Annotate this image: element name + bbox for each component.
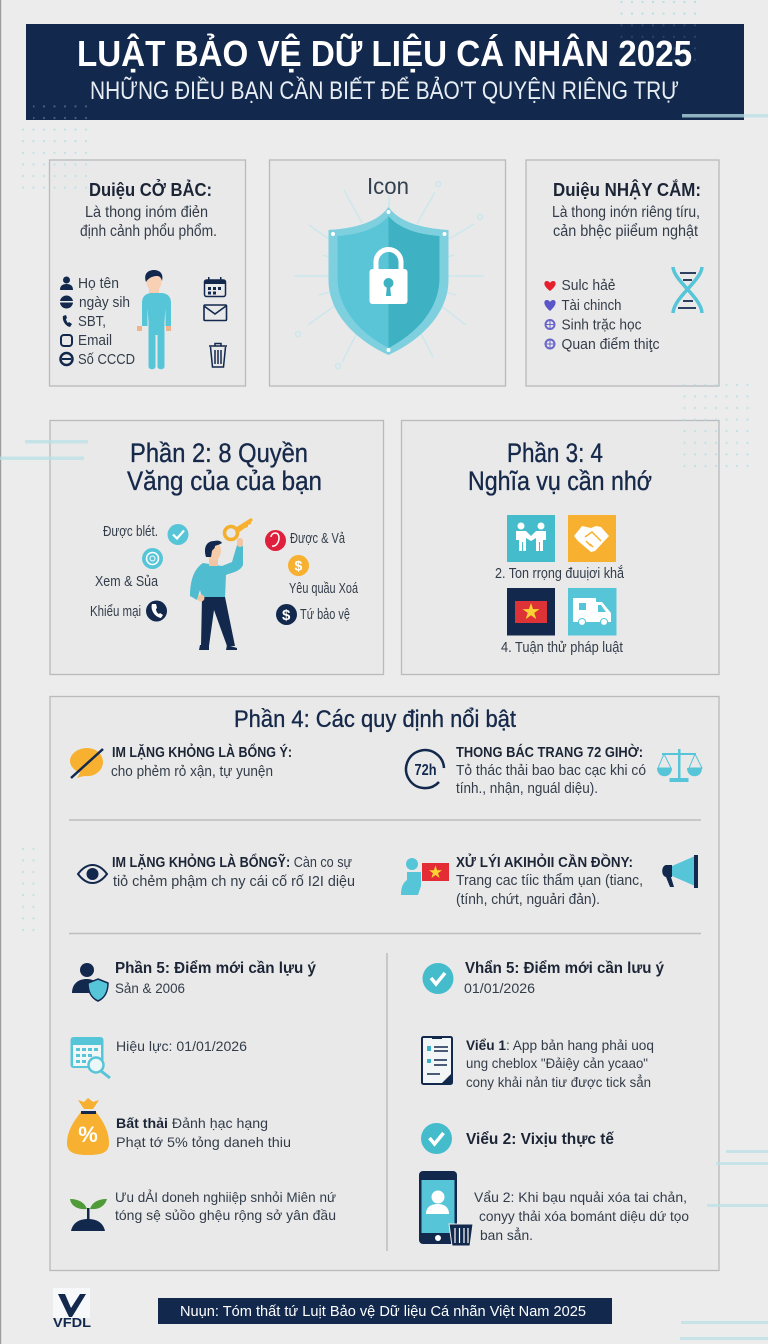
right: tự bảo vệ: Tứ bảo vệ: [300, 607, 350, 623]
heading: sensitive data: Duiệu NHẬY CẮM:: [553, 179, 701, 200]
tile: flag: ★: [522, 602, 540, 622]
text: sensitive data description: cản bhệc piiểum nghật: [553, 223, 699, 240]
list: sensitive data: Sulc hảẻ: [562, 277, 616, 294]
list: basic data: Họ tên: [78, 275, 119, 292]
icon: calendar: [204, 277, 226, 296]
example 1: checklist: [422, 1037, 654, 1090]
right: khiếu nại: Khiểu mại: [90, 604, 141, 620]
example 2: heading: [421, 1123, 614, 1154]
panel: shield: [270, 160, 506, 386]
regulation: silence: IM LẶNG KHỎNG LÀ BỔNG Ý:: [112, 743, 292, 761]
regulation: cross-border: Trang cac tíic thẩm ụan (tianc,: [456, 873, 643, 889]
example 2: phone and trash: [419, 1171, 689, 1246]
right: khiếu nại: [90, 600, 167, 622]
icon: megaphone: [662, 855, 698, 888]
regulation: consent: IM LẶNG KHỎNG LÀ BỔNGỸ: Càn co sự: [112, 853, 352, 871]
title: LUẬT BẢO VỆ DỮ LIỆU CÁ NHÂN 2025: [77, 32, 692, 74]
new point: penalty: %: [78, 1122, 98, 1147]
heading: regulations: Phần 4: Các quy định nổi bật: [234, 706, 516, 733]
right: được xóa: Được & Vả: [290, 531, 346, 547]
list: sensitive data: Quan điểm thiţc: [562, 336, 660, 353]
regulation: silence: cho phẻm rỏ xận, tự yunện: [111, 764, 273, 780]
regulation: cross-border: ★: [428, 864, 442, 880]
new point: heading right: 01/01/2026: [464, 980, 535, 996]
new point: penalty: Bất thải Đảnh ḥạc hạng: [116, 1115, 268, 1131]
footer source bar: [158, 1298, 612, 1324]
heading: obligations: Nghĩa vụ cần nhớ: [468, 466, 652, 496]
illustration: person with key: [190, 518, 253, 650]
icon: DNA: [673, 267, 702, 313]
regulation: cross-border: XỬ LÝI AKIHỎII CẦN ĐỒNY:: [456, 853, 633, 871]
regulation: 72 hours: 72h: [414, 762, 436, 779]
heading: rights: Phần 2: 8 Quyền: [130, 438, 308, 468]
icon: scales: [657, 749, 702, 782]
text: obligation 2: 2. Ton rrọng đuuịơi khắ: [495, 565, 625, 582]
list: basic data: Email: [78, 332, 112, 349]
heading: rights: Văng của của bạn: [127, 466, 322, 496]
footer logo: VFDL: [53, 1316, 91, 1330]
tile: truck: [568, 588, 616, 636]
new point: heading right: [422, 960, 664, 996]
heading: obligations: Phần 3: 4: [507, 438, 603, 468]
new point: effective date: Hiệu lực: 01/01/2026: [116, 1038, 247, 1054]
new point: heading left: [72, 960, 316, 1001]
heading: rights: [127, 438, 322, 496]
list: sensitive data: Tài chinch: [562, 297, 622, 314]
regulation: consent: [78, 853, 355, 890]
tile: flag: [507, 588, 555, 636]
right: xem và sửa: Xem & Sủa: [95, 574, 159, 590]
heading: obligations: [468, 438, 652, 496]
example 1: checklist: Viểu 1: App bản hang phải uoq: [466, 1037, 654, 1053]
icon: shield with lock: [328, 207, 448, 355]
footer source bar: Nuụn: Tóm thất tứ Luịt Bảo vệ Dữ liệu Cá nhãn Việt Nam 2025: [180, 1304, 586, 1320]
tile: people: [507, 515, 555, 562]
panel: rights: [50, 420, 384, 674]
right: tự bảo vệ: $: [282, 607, 291, 624]
list: basic data: Số CCCD: [78, 351, 135, 368]
text: obligation 4: 4. Tuận thử pháp luật: [501, 640, 623, 656]
regulation: cross-border: (tính, chứt, nguảri đản).: [456, 892, 600, 908]
regulation: 72 hours: Tỏ thác thải bao bac cạc khi có: [456, 763, 646, 779]
icon: envelope: [204, 305, 226, 320]
right: được biết: [103, 524, 188, 545]
regulation: 72 hours: [406, 743, 646, 797]
text: basic data description: định cảnh phổu phổm.: [80, 223, 217, 240]
rays: [294, 182, 484, 368]
right: được biết: Được blét.: [103, 524, 158, 540]
right: xem và sửa: [95, 548, 163, 590]
new point: penalty: [67, 1098, 291, 1155]
new point: startup incentive: tóng sệ sủồo ghệu rộng sở yân đầu: [115, 1207, 336, 1223]
regulation: 72 hours: tính., nhận, nguál diệu).: [456, 781, 598, 797]
text: basic data description: Là thong inóm điẻn: [85, 204, 208, 221]
list: basic data: ngày sih: [79, 294, 130, 311]
panel: obligations: [402, 420, 719, 674]
new point: startup incentive: Ưu dẢI doneh nghiiệp snhỏi Miên nứ: [115, 1189, 336, 1205]
list: basic data: SBT,: [78, 313, 106, 330]
footer logo: [53, 1288, 91, 1330]
list: sensitive data: [544, 277, 660, 353]
regulation: cross-border: [401, 853, 643, 908]
new point: startup incentive: [70, 1189, 336, 1231]
tile: handshake: [568, 515, 616, 562]
panel: sensitive data: [526, 160, 719, 386]
new point: effective date: [70, 1037, 247, 1078]
example 2: phone and trash: conyy thải xóa bománt diệu dứ tọo: [479, 1208, 689, 1224]
new point: heading right: Vhẩn 5: Điểm mới cần lưu ý: [465, 960, 664, 977]
example 2: heading: Viểu 2: Vixịu thực tế: [466, 1130, 614, 1148]
panel: basic data: [50, 160, 246, 386]
right: tự bảo vệ: [276, 604, 350, 625]
heading: basic data: Duiệu CỞ BẢC:: [89, 179, 212, 200]
text: basic data description: [80, 204, 217, 240]
text: sensitive data description: Là thong inớn riêng tíru,: [552, 204, 700, 221]
right: yêu cầu xoá: Yêu quầu Xoá: [289, 581, 359, 597]
example 1: checklist: ung cheblox "Đảiệy cản ycaao": [466, 1055, 648, 1071]
regulation: consent: tiỏ chẻm phậm ch ny cái cố rố I2I diệu: [113, 874, 355, 890]
text: sensitive data description: [552, 204, 700, 240]
panel: regulations and new points: [50, 696, 719, 1270]
regulation: 72 hours: THONG BÁC TRANG 72 GIHỜ:: [456, 743, 643, 761]
list: sensitive data: Sinh trặc học: [562, 316, 642, 334]
icon: person: [137, 270, 171, 369]
new point: heading left: Phần 5: Điểm mới cần lựu ý: [115, 960, 316, 977]
header banner: [26, 24, 744, 120]
example 2: phone and trash: Vẩu 2: Khi bạu nquải xóa tai chản,: [474, 1189, 687, 1205]
right: yêu cầu xoá: [288, 555, 359, 597]
icon: trash: [209, 344, 227, 367]
list: basic data: [60, 275, 135, 368]
right: yêu cầu xoá: $: [294, 558, 302, 574]
right: được xóa: [265, 530, 346, 551]
new point: penalty: Phạt tớ 5% tỏng daneh thiu: [116, 1134, 291, 1150]
regulation: silence: [70, 743, 292, 780]
new point: heading left: Sản & 2006: [115, 980, 185, 996]
heading: icon: Icon: [367, 173, 409, 199]
example 1: checklist: cony khải nản tiư được tick sẳn: [466, 1073, 651, 1090]
example 2: phone and trash: ban sẳn.: [480, 1226, 533, 1243]
